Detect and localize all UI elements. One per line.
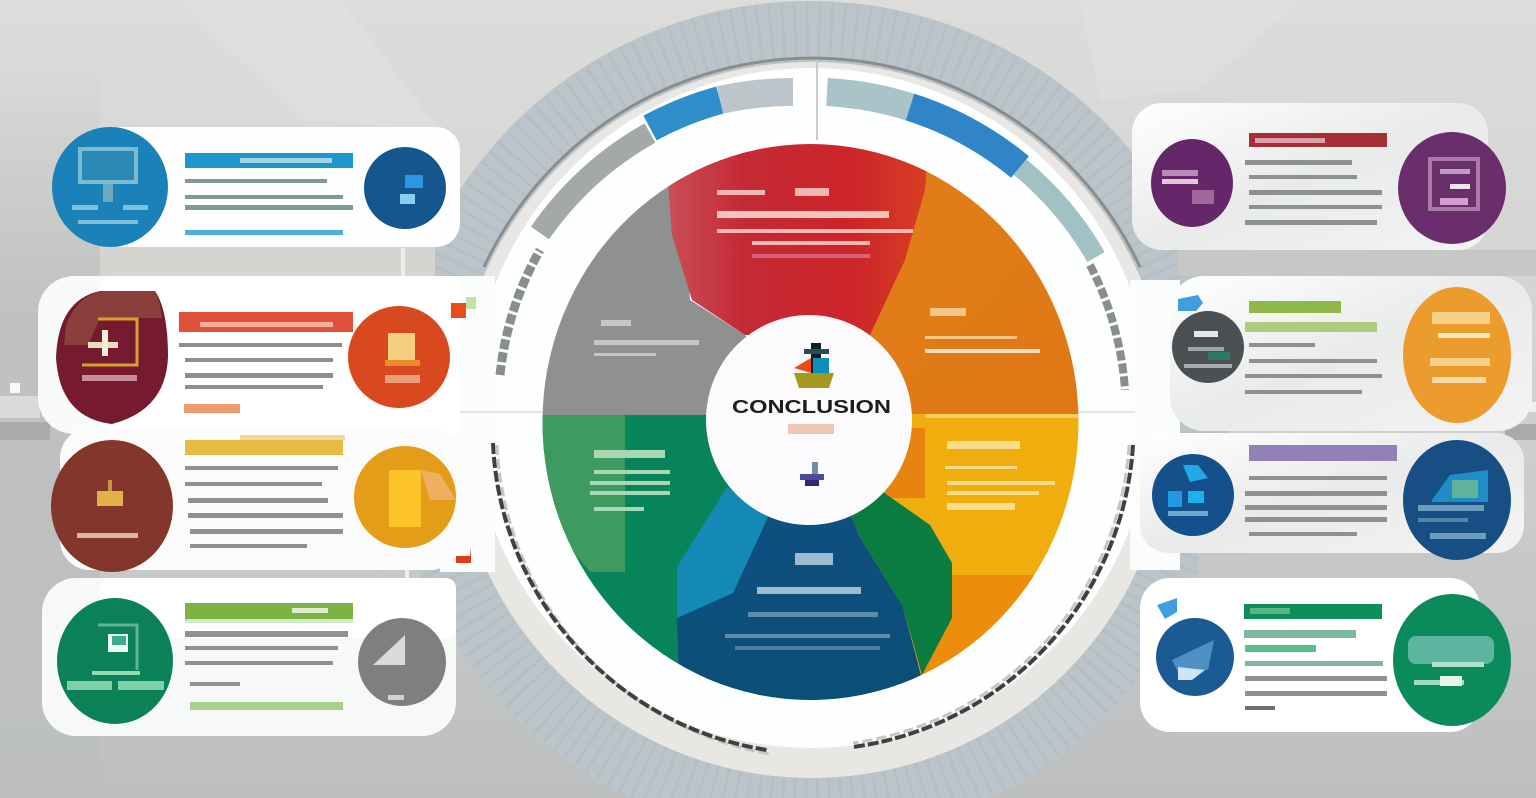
accent bar [185,230,343,235]
label: red segment [717,188,913,258]
segment: dark blue [677,513,930,710]
label: green segment [590,450,670,511]
connector backdrops [440,276,1180,572]
icon: brown circle [51,440,173,572]
arc: blue left [650,100,720,128]
connector lines [401,248,409,618]
icon: purple small circle [1151,139,1233,227]
text lines [179,343,342,389]
icon: boat [794,343,834,388]
center circle [706,315,912,525]
label: yellow segment [945,441,1055,510]
segment: green left [530,415,820,710]
ring thin lines [420,60,1135,754]
icon: green circle [57,598,173,724]
segment: yellow [810,414,1090,714]
connector markers [451,295,1203,619]
panel: left card 4 [42,578,456,736]
panel: left card 2 [38,276,460,436]
text lines [185,466,343,548]
heading bar [185,435,345,455]
heading bar [185,153,353,168]
label: gray segment [594,320,699,356]
arc: blue right [910,107,1020,167]
icon: orange circle [1403,287,1511,423]
text lines [185,179,353,210]
icon: gray circle [358,618,446,706]
text lines [1244,630,1387,710]
panel: right card 2 [1170,276,1532,431]
pie chart [530,130,1090,714]
arc: gray top [720,92,793,100]
text lines [185,631,348,686]
arc: teal right [1020,167,1096,257]
icon: dark gray circle [1172,311,1244,383]
panel: right card 1 [1132,103,1506,250]
segment: gray [542,178,746,415]
heading bar [1244,604,1382,619]
icon: maroon circle [56,291,168,424]
heading bar [185,603,353,623]
segment: green right [850,492,952,675]
text lines [1245,160,1382,225]
icon: red-orange circle [348,306,450,408]
segment: orange [870,157,1078,415]
text lines [1245,476,1387,536]
icon: small blue circle [364,147,446,229]
label: blue segment [725,553,890,650]
title: conclusion: CONCLUSION [732,397,891,417]
accent bar [190,702,343,710]
icon: blue small circle [1156,618,1234,696]
outer hatched ring [422,32,1198,798]
gaps between cards [100,247,1536,578]
text lines [1245,343,1382,394]
icon: yellow circle [354,446,456,548]
icon: small cross [800,462,824,486]
subtitle bar [788,424,834,434]
icon: purple big circle [1398,132,1506,244]
segment: red [664,130,930,335]
panel: left card 3 [51,428,460,572]
icon: blue small circle [1152,454,1234,536]
accent bar [184,404,240,413]
segment labels [590,188,1055,650]
heading bar [1249,301,1341,313]
segment: teal [677,487,768,618]
subheading bar [1245,322,1377,332]
label: orange segment [925,308,1040,353]
arc: teal top [827,92,910,107]
arc: gray left [540,133,650,233]
panel: left card 1 [52,127,460,247]
heading bar [1249,445,1397,461]
heading bar [1249,133,1387,147]
white ring disc [454,58,1170,778]
panel: right card 3 [1140,433,1524,560]
ring arc segments [540,92,1096,257]
icon: big blue circle [52,127,168,247]
icon: blue big circle [1403,440,1511,560]
panel: right card 4 [1140,578,1511,732]
heading bar [179,312,353,332]
icon: green big circle [1393,594,1511,726]
